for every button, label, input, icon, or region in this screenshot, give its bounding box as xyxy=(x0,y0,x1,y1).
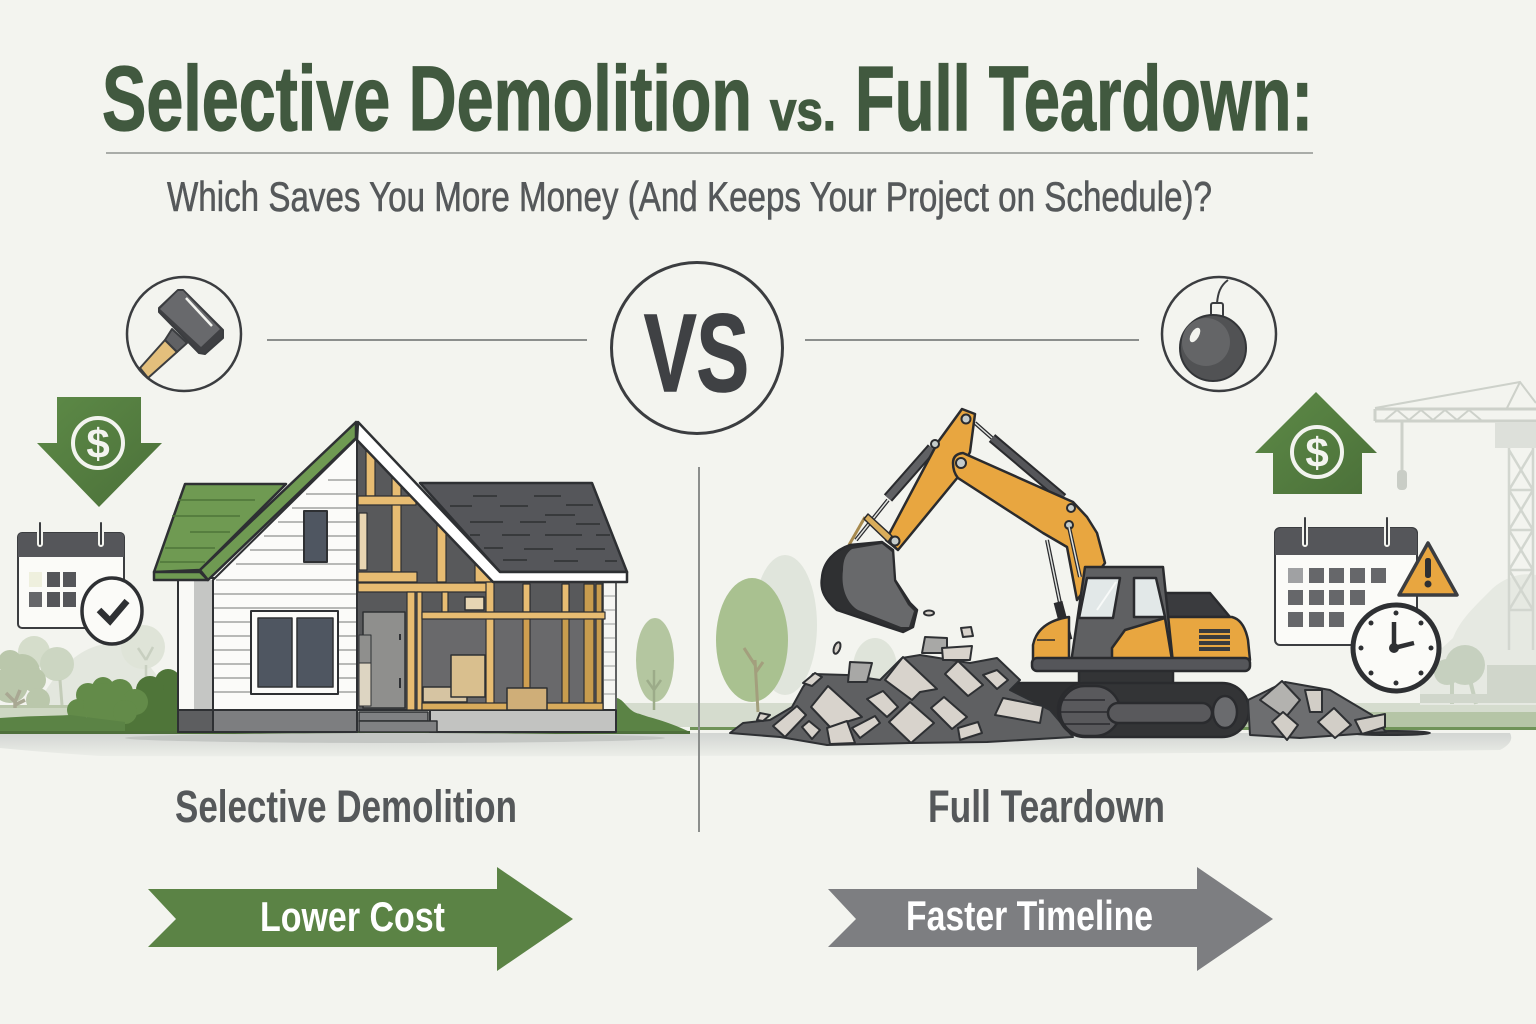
VS badge: VS xyxy=(644,292,749,415)
undercarriage rear xyxy=(1006,683,1106,723)
white siding wall xyxy=(213,438,357,732)
icon: lower cost down arrow xyxy=(37,397,162,507)
stick arm xyxy=(886,409,975,550)
background crane xyxy=(1375,382,1536,705)
engine housing top xyxy=(1165,593,1230,617)
steps xyxy=(359,712,437,732)
rear counterweight xyxy=(1033,617,1069,660)
bucket xyxy=(822,542,917,632)
arrow: lower cost: Lower Cost xyxy=(260,893,445,940)
house shadow xyxy=(125,733,665,743)
attic window xyxy=(304,511,327,562)
cutaway interior xyxy=(357,438,603,710)
ground band xyxy=(0,733,1511,756)
wall foundation xyxy=(213,710,357,732)
icon: wrecking ball xyxy=(1162,277,1276,391)
background landscape: right xyxy=(617,555,1536,734)
arrow: lower cost xyxy=(148,867,573,971)
exposed timber framing xyxy=(358,450,605,710)
icon: higher cost up arrow: $ xyxy=(1305,429,1329,476)
link bar xyxy=(864,514,892,542)
icon: short calendar with check xyxy=(18,523,142,644)
stick cylinder and rod xyxy=(849,448,932,545)
green gable trim xyxy=(200,422,356,580)
label: full teardown: Full Teardown xyxy=(928,781,1165,832)
label: selective demolition: Selective Demolition xyxy=(175,781,517,832)
title: Selective Demolition xyxy=(102,48,752,150)
engine housing xyxy=(1113,617,1250,660)
VS badge xyxy=(612,262,782,434)
green roof xyxy=(154,484,286,580)
door xyxy=(359,612,405,708)
cab xyxy=(1071,567,1173,663)
rubble pile: secondary xyxy=(1248,681,1430,740)
dark shingle roof xyxy=(420,483,627,572)
icon: long calendar with warning and clock xyxy=(1275,518,1457,691)
white roof trim xyxy=(357,422,627,582)
boom cylinders xyxy=(1047,527,1080,603)
excavator crawler track xyxy=(1058,683,1249,737)
framing boxes xyxy=(423,597,547,710)
subtitle: Which Saves You More Money (And Keeps Your Project on Schedule)? xyxy=(167,173,1212,220)
title: Full Teardown: xyxy=(855,48,1313,150)
lower frame xyxy=(1032,658,1250,671)
icon: hammer xyxy=(127,277,241,391)
engine vent xyxy=(1199,629,1230,651)
living room window xyxy=(251,611,338,694)
title: vs. xyxy=(770,79,836,142)
left bushes xyxy=(125,669,181,732)
excavator xyxy=(822,409,1250,723)
boom arm xyxy=(953,453,1105,600)
icon: higher cost up arrow xyxy=(1255,392,1377,494)
rubble pile: main xyxy=(730,610,1073,745)
background landscape: left xyxy=(0,625,181,732)
left side wall xyxy=(178,578,214,732)
house: selective demolition cutaway xyxy=(125,422,665,743)
arrow: faster timeline: Faster Timeline xyxy=(906,892,1153,939)
upper boom cylinder xyxy=(975,423,1063,498)
right wall strip xyxy=(603,582,616,710)
right foundation xyxy=(430,710,616,732)
icon: lower cost down arrow: $ xyxy=(86,420,110,467)
arrow: faster timeline xyxy=(828,867,1273,971)
